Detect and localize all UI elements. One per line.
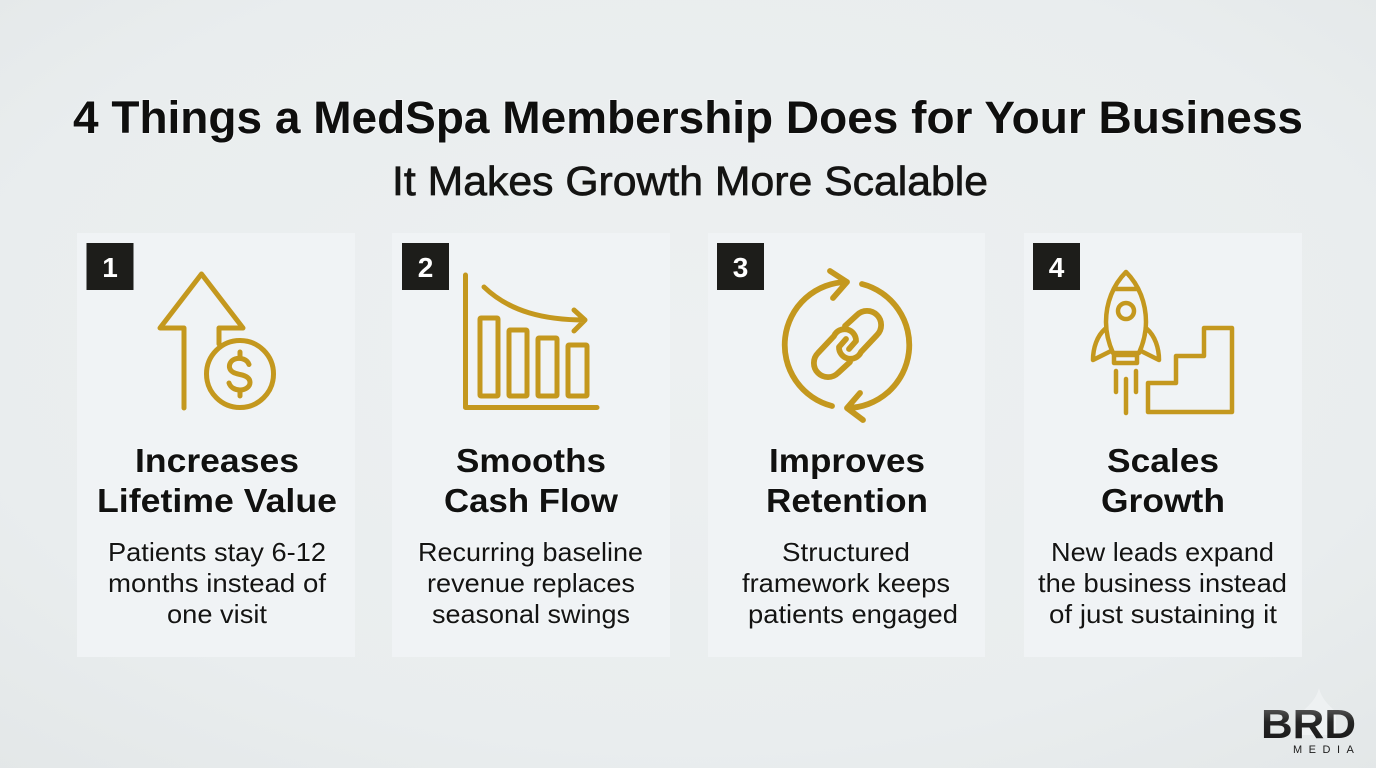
description [742,537,958,629]
title: 4 Things a MedSpa Membership Does for Your Business [73,92,1303,143]
logo: BRD Media: MEDIA [1293,744,1360,756]
description: framework keeps [742,568,950,598]
number badge 3 [717,243,764,290]
heading: Lifetime Value [97,482,337,519]
icon: rocket and stairs [1093,272,1232,413]
panel: improves retention [708,233,985,657]
heading: Retention [766,482,928,519]
heading [97,442,337,519]
icon: declining bar chart with arrow [466,275,597,408]
heading [1101,442,1225,519]
description: of just sustaining it [1049,599,1278,629]
description [108,537,327,629]
description: months instead of [108,568,327,598]
heading [766,442,928,519]
heading: Growth [1101,482,1225,519]
description: Patients stay 6-12 [108,537,326,567]
number badge 1 [86,243,134,290]
number badge 4 [1033,243,1080,290]
heading: Improves [769,442,925,479]
logo: BRD Media [1261,688,1360,756]
description: Structured [782,537,910,567]
description: revenue replaces [427,568,635,598]
description: New leads expand [1051,537,1274,567]
number badge 4: 4 [1049,252,1065,283]
heading: Increases [135,442,299,479]
number badge 1: 1 [102,252,118,283]
heading: Cash Flow [444,482,618,519]
panel: scales growth [1024,233,1302,657]
description: patients engaged [748,599,958,629]
number badge 2: 2 [418,252,433,283]
description: the business instead [1038,568,1287,598]
icon: up arrow with dollar coin [160,274,274,408]
description: seasonal swings [432,599,630,629]
heading: Scales [1107,442,1219,479]
logo: BRD Media: BRD [1261,701,1356,747]
number badge 3: 3 [733,252,748,283]
description: one visit [167,599,268,629]
heading [444,442,618,519]
description [1038,537,1287,629]
description [418,537,643,629]
number badge 2 [402,243,449,290]
subtitle: It Makes Growth More Scalable [392,158,988,204]
panel: increases lifetime value [77,233,355,657]
panel: smooths cash flow [392,233,670,657]
heading: Smooths [456,442,606,479]
icon: chain link in circular arrows [785,271,909,420]
description: Recurring baseline [418,537,643,567]
